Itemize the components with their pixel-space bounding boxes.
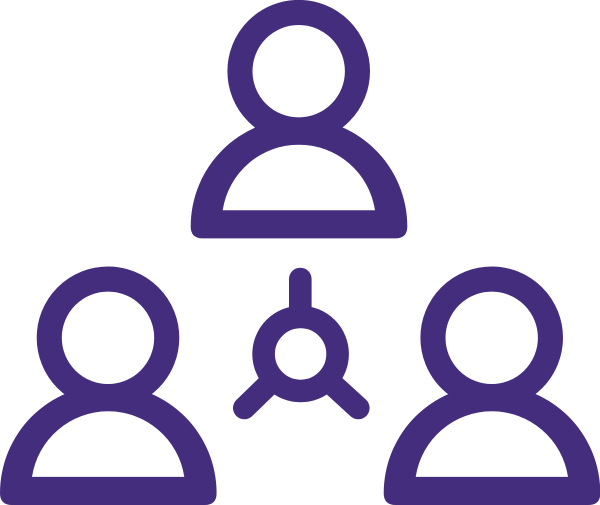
icon: top person bbox=[191, 12, 407, 238]
icon: bottom left person bbox=[0, 279, 217, 505]
icon: central hub with three spokes bbox=[244, 279, 358, 408]
icon: bottom right person bbox=[384, 279, 600, 505]
